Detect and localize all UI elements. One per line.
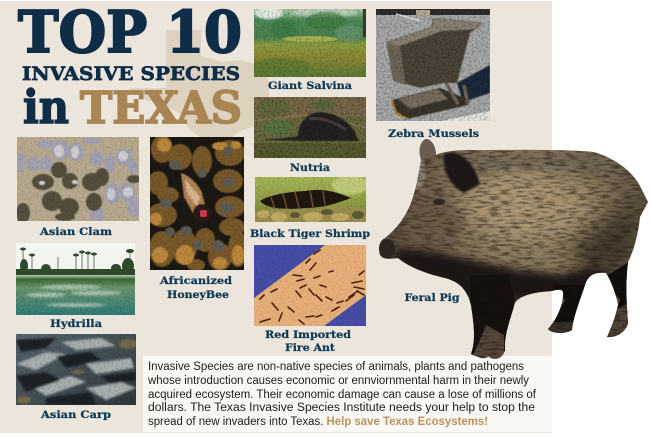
title line: Top 10: TOP 10 <box>18 0 242 66</box>
species: giant salvina <box>250 7 366 92</box>
label: giant salvina: Giant Salvina <box>268 80 352 92</box>
species: africanized honeybee <box>147 135 248 301</box>
feral pig cutout <box>379 139 648 359</box>
description text box: spread of new invaders into Texas. Help save Texas Ecosystems! <box>148 416 488 428</box>
species: red imported fire ant <box>254 245 366 354</box>
description text box: whose introduction causes economic or ennviornmental harm in their newly <box>147 375 529 387</box>
title word: Texas: TEXAS <box>80 83 242 134</box>
body paragraph: Invasive Species are non-native species of animals, plants and pathogens <box>148 361 524 373</box>
description text box: dollars. The Texas Invasive Species Institute needs your help to stop the <box>148 402 535 414</box>
species: hydrilla <box>16 243 135 330</box>
label: africanized honeybee: HoneyBee <box>167 289 229 301</box>
pig ear <box>444 152 480 193</box>
photo: asian clam <box>17 137 139 221</box>
species: asian clam <box>16 137 143 238</box>
photo: black tiger shrimp <box>255 177 366 222</box>
label: nutria: Nutria <box>290 162 330 174</box>
description text box <box>143 356 552 432</box>
species: zebra mussels <box>376 9 490 140</box>
photo: nutria <box>254 97 366 158</box>
species: black tiger shrimp <box>250 175 370 240</box>
label: hydrilla: Hydrilla <box>50 318 102 330</box>
title line: Invasive Species: INVASIVE SPECIES <box>22 63 240 85</box>
description text box: acquired ecosystem. Their economic damage can cause a lose of millions of <box>148 389 537 401</box>
Texas map silhouette <box>128 30 270 137</box>
pig back ear <box>420 139 436 160</box>
label: red imported fire ant: Red Imported <box>265 329 352 341</box>
species: nutria <box>254 97 366 174</box>
label: asian clam: Asian Clam <box>39 226 112 238</box>
label: asian carp: Asian Carp <box>40 409 111 421</box>
pig snout <box>379 239 395 259</box>
label: zebra mussels: Zebra Mussels <box>388 128 479 140</box>
photo: honeybees with marked queen <box>150 137 244 270</box>
label: red imported fire ant <box>265 329 352 354</box>
species: asian carp <box>16 334 137 421</box>
label: red imported fire ant: Fire Ant <box>285 342 335 354</box>
pig eye <box>433 199 445 205</box>
photo: fire ants on wood <box>254 245 366 326</box>
title <box>18 0 242 134</box>
label: feral pig: Feral Pig <box>404 292 460 304</box>
label: africanized honeybee <box>159 275 233 301</box>
photo: asian carp <box>16 334 136 405</box>
label: black tiger shrimp: Black Tiger Shrimp <box>250 228 370 240</box>
photo: giant salvina <box>254 9 366 77</box>
photo: hydrilla-covered lake <box>16 243 135 315</box>
title word: in: in <box>23 80 69 134</box>
photo: zebra mussels shopping cart <box>376 9 490 121</box>
label: africanized honeybee: Africanized <box>159 275 233 287</box>
